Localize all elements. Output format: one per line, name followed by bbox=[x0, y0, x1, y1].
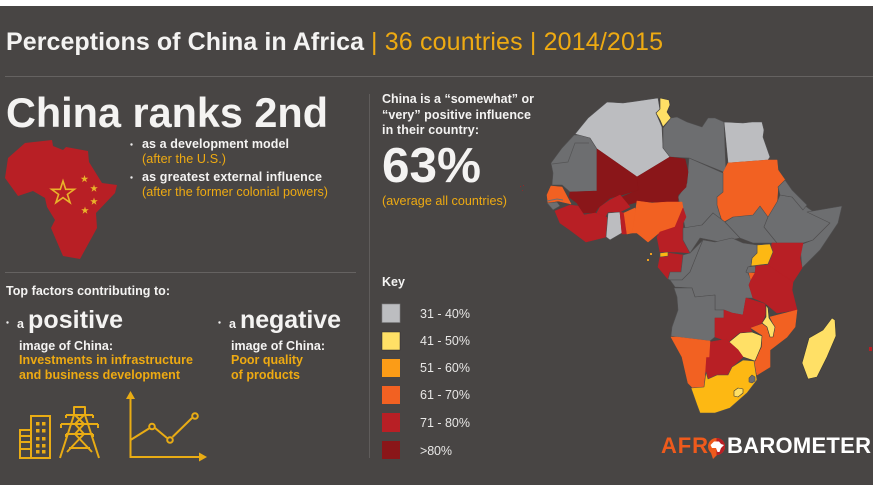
panel: negative image bbox=[218, 306, 341, 382]
icon: line chart bbox=[126, 391, 207, 462]
panel: positive image: and business development bbox=[19, 368, 181, 382]
text block: ranking details bbox=[130, 137, 328, 199]
panel: negative image: negative bbox=[240, 306, 341, 334]
text block: ranking details: (after the former colonial powers) bbox=[142, 185, 328, 199]
panel: negative image: Poor quality bbox=[231, 353, 303, 367]
legend: key: 71 - 80% bbox=[420, 416, 470, 430]
panel: negative image: a bbox=[229, 317, 237, 331]
panel: positive image: positive bbox=[28, 306, 123, 334]
legend: key bbox=[382, 275, 470, 459]
heading: China ranks 2nd: China ranks 2nd bbox=[6, 90, 328, 136]
caption: average all countries: (average all countries) bbox=[382, 194, 507, 208]
text block: positive influence statement bbox=[382, 92, 534, 137]
icon: Africa map with Chinese flag stars bbox=[5, 140, 117, 259]
panel: negative image: image of China: bbox=[231, 339, 325, 353]
text block: ranking details: as a development model bbox=[142, 137, 289, 151]
text block: ranking details: (after the U.S.) bbox=[142, 152, 226, 166]
map: Africa choropleth bbox=[520, 98, 872, 413]
text block: ranking details: as greatest external influence bbox=[142, 170, 322, 184]
legend: key: 51 - 60% bbox=[420, 361, 470, 375]
logo: Afrobarometer: BAROMETER bbox=[727, 433, 871, 458]
panel: negative image: of products bbox=[231, 368, 300, 382]
logo: Afrobarometer bbox=[661, 433, 871, 459]
icon: power pylon bbox=[60, 407, 99, 458]
panel: positive image: image of China: bbox=[19, 339, 113, 353]
legend: key: Key bbox=[382, 275, 405, 289]
text block: positive influence statement: “very” positive influence bbox=[382, 108, 531, 122]
panel: positive image bbox=[6, 306, 193, 382]
logo: Afrobarometer: AFR bbox=[661, 433, 708, 458]
legend: key: 31 - 40% bbox=[420, 307, 470, 321]
legend: key: >80% bbox=[420, 444, 452, 458]
big number: 63%: 63% bbox=[382, 138, 481, 193]
panel: positive image: a bbox=[17, 317, 25, 331]
legend: key: 41 - 50% bbox=[420, 334, 470, 348]
legend: key: 61 - 70% bbox=[420, 388, 470, 402]
text block: positive influence statement: in their country: bbox=[382, 123, 479, 137]
text block: top factors heading: Top factors contributing to: bbox=[6, 284, 170, 298]
title: Perceptions of China in Africa bbox=[6, 28, 365, 56]
title bbox=[6, 28, 663, 56]
title: | 36 countries | 2014/2015 bbox=[371, 28, 663, 56]
icon: buildings bbox=[20, 416, 50, 458]
panel: positive image: Investments in infrastructure bbox=[19, 353, 193, 367]
text block: positive influence statement: China is a “somewhat” or bbox=[382, 92, 534, 106]
